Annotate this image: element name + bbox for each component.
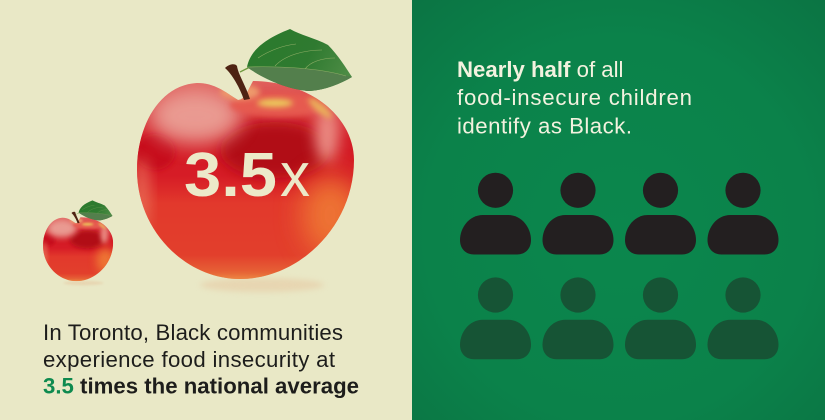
pictogram: dark people row [460,173,778,254]
icon: person 3 [625,173,696,254]
icon: person 4 [708,173,778,254]
big number: 3.5x: x [280,141,310,210]
panel: cream left background [0,0,412,420]
text block: Toronto statement: In Toronto, Black communities [43,320,343,345]
icon: person 5 [460,277,531,359]
big number: 3.5x [184,141,310,210]
icon: small apple [41,200,115,285]
text block: nearly half statement: identify as Black. [457,114,632,138]
text block: Toronto statement [43,320,359,398]
big number: 3.5x: 3.5 [184,141,277,210]
text block: nearly half statement: Nearly half of all [457,57,623,82]
text block: Toronto statement: 3.5 times the national average [43,374,359,398]
icon: person 8 [708,277,778,359]
text block: nearly half statement: food-insecure children [457,85,692,110]
text block: nearly half statement [457,57,692,138]
icon: person 7 [625,277,696,359]
icon: person 1 [460,173,531,254]
panel: green right background [412,0,825,420]
icon: large apple [130,29,360,292]
icon: person 2 [542,173,614,254]
text block: Toronto statement: experience food insecurity at [43,347,335,372]
icon: person 6 [542,277,614,359]
pictogram: muted people row [460,277,778,359]
